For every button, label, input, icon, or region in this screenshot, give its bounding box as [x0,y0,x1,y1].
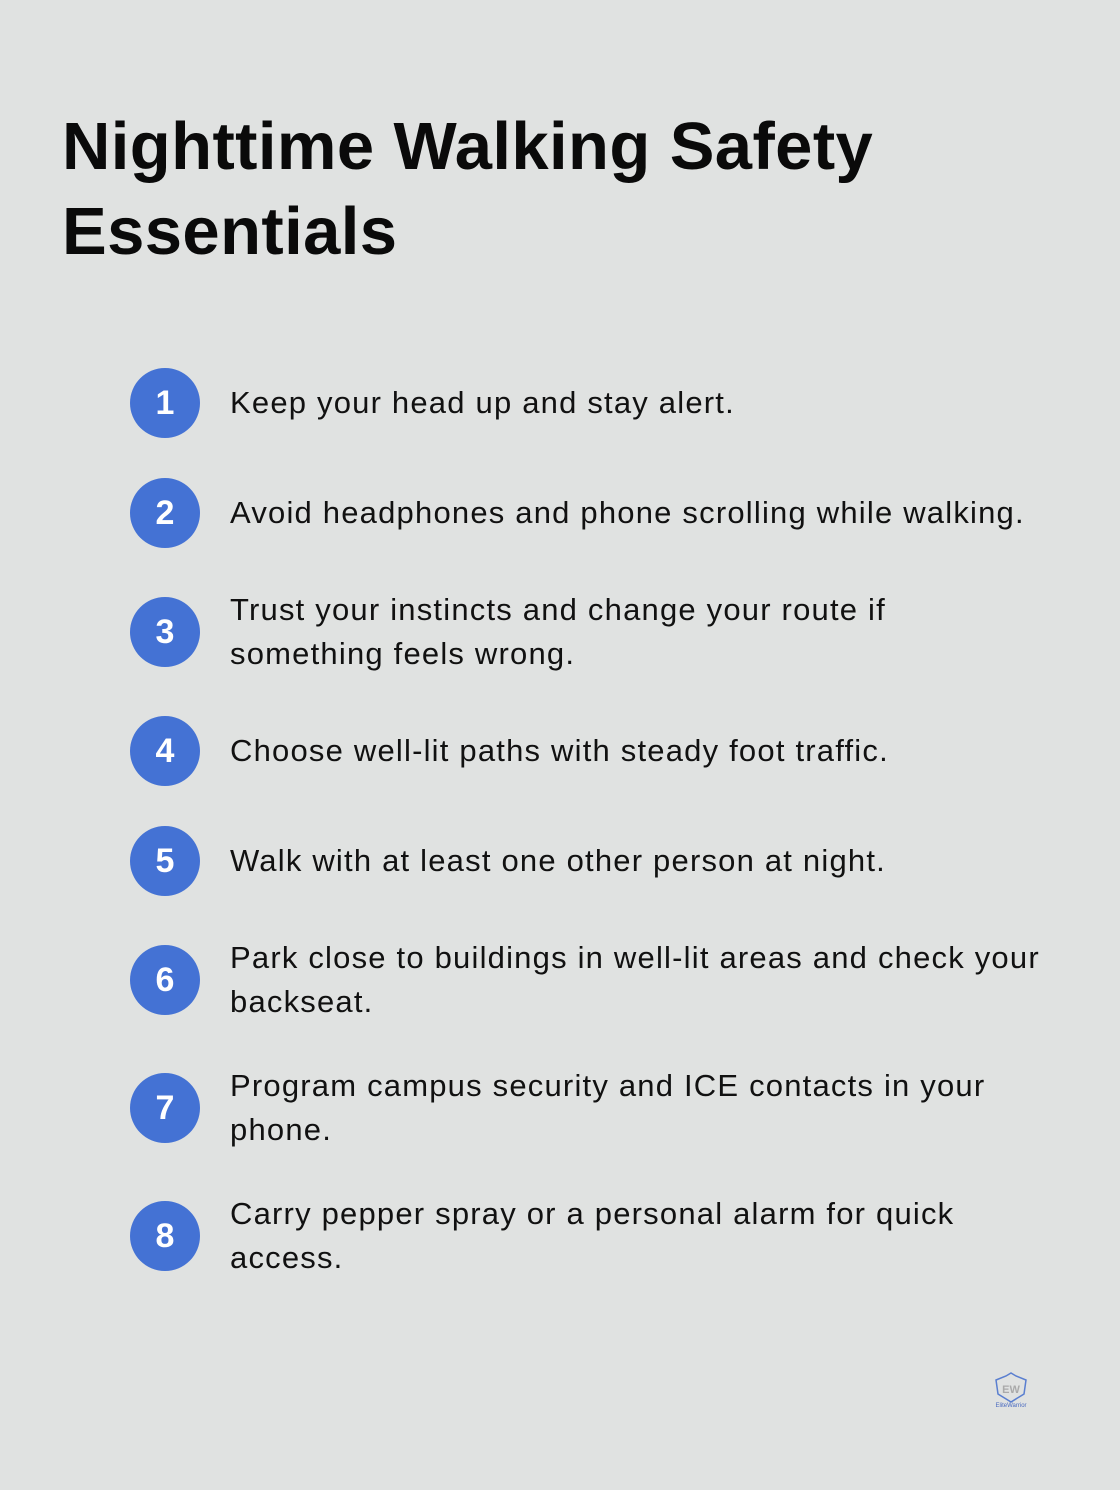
item 2: 2 [156,494,174,532]
item 3: 3 [156,613,174,651]
item 2: Avoid headphones and phone scrolling while walking. [230,495,1025,530]
item 1 [130,368,735,438]
item 7: 7 [156,1089,174,1127]
item 5 [130,826,886,896]
item 4 [130,716,889,786]
title [62,109,873,269]
item 8: access. [230,1240,344,1275]
logo: EW [1002,1384,1020,1396]
item 6: backseat. [230,984,374,1019]
item 8: 8 [156,1217,174,1255]
title: Essentials [62,194,397,269]
item 4: 4 [156,732,174,770]
item 7 [130,1068,985,1147]
item 2 [130,478,1025,548]
item 4: Choose well-lit paths with steady foot traffic. [230,733,889,768]
item 5: 5 [156,842,174,880]
item 3: Trust your instincts and change your route if [230,592,886,627]
item 8 [130,1196,954,1275]
item 6: Park close to buildings in well-lit areas and check your [230,940,1040,975]
item 7: Program campus security and ICE contacts in your [230,1068,985,1103]
item 3 [130,592,886,671]
item 1: 1 [156,384,174,422]
item 6: 6 [156,961,174,999]
title: Nighttime Walking Safety [62,109,873,184]
item 5: Walk with at least one other person at night. [230,843,886,878]
item 6 [130,940,1040,1019]
item 8: Carry pepper spray or a personal alarm for quick [230,1196,954,1231]
item 1: Keep your head up and stay alert. [230,385,735,420]
logo: EliteWarrior [995,1403,1027,1409]
item 7: phone. [230,1112,332,1147]
item 3: something feels wrong. [230,636,575,671]
logo [995,1372,1027,1409]
